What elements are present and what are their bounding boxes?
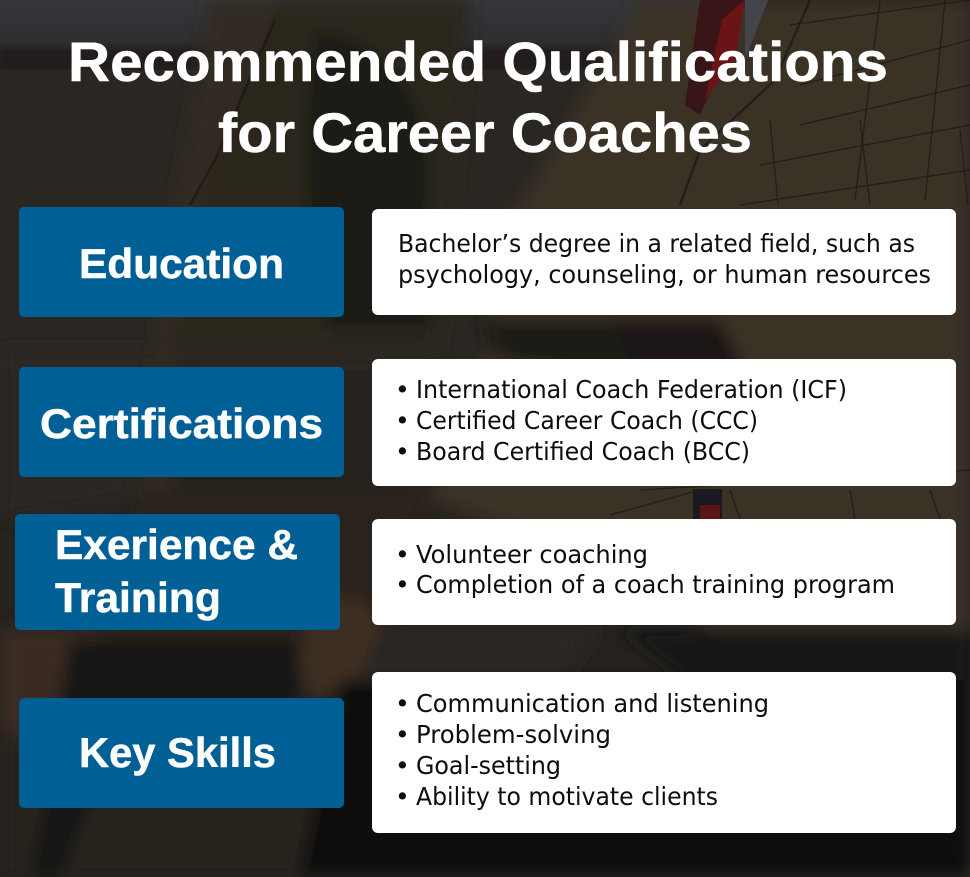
label: experience and training: Exerience & xyxy=(55,521,298,568)
panel: experience list: • xyxy=(395,570,410,599)
panel: key skills list: • xyxy=(395,751,410,780)
necktie and shirt xyxy=(685,0,768,519)
panel: certifications list: • xyxy=(395,375,410,404)
row: key skills xyxy=(19,672,956,833)
panel: key skills list: • xyxy=(395,689,410,718)
panel: certifications list xyxy=(372,359,956,486)
row: certifications xyxy=(19,359,956,486)
panel: certifications list: • xyxy=(395,406,410,435)
title: for Career Coaches xyxy=(218,101,752,164)
plaid jacket lines xyxy=(610,0,970,519)
jacket lapels xyxy=(190,0,810,205)
label: experience and training xyxy=(15,514,340,630)
panel: experience list xyxy=(372,519,956,625)
panel: education details: Bachelor’s degree in a related field, such as xyxy=(398,229,915,258)
title xyxy=(68,30,888,164)
label: education xyxy=(19,207,344,317)
panel: experience list: • xyxy=(395,540,410,569)
panel: education details: psychology, counseling, or human resources xyxy=(398,260,931,289)
panel: certifications list: Certified Career Coach (CCC) xyxy=(416,406,758,435)
row: education xyxy=(19,207,956,317)
panel: key skills list: Communication and listening xyxy=(416,689,769,718)
panel: experience list: Volunteer coaching xyxy=(416,540,648,569)
panel: certifications list: Board Certified Coach (BCC) xyxy=(416,437,750,466)
label: certifications xyxy=(19,367,344,477)
label: certifications: Certifications xyxy=(40,400,323,447)
title: Recommended Qualifications xyxy=(68,30,888,93)
label: key skills: Key Skills xyxy=(79,729,276,776)
panel: key skills list: Goal-setting xyxy=(416,751,561,780)
label: key skills xyxy=(19,698,344,808)
panel: key skills list: • xyxy=(395,782,410,811)
panel: key skills list: Ability to motivate clients xyxy=(416,782,718,811)
panel: education details xyxy=(372,209,956,315)
panel: key skills list: Problem-solving xyxy=(416,720,611,749)
label: experience and training: Training xyxy=(55,574,221,621)
panel: experience list: Completion of a coach training program xyxy=(416,570,895,599)
panel: key skills list xyxy=(372,672,956,833)
label: education: Education xyxy=(79,240,284,287)
panel: certifications list: International Coach Federation (ICF) xyxy=(416,375,847,404)
panel: certifications list: • xyxy=(395,437,410,466)
panel: key skills list: • xyxy=(395,720,410,749)
row: experience and training xyxy=(15,514,956,630)
